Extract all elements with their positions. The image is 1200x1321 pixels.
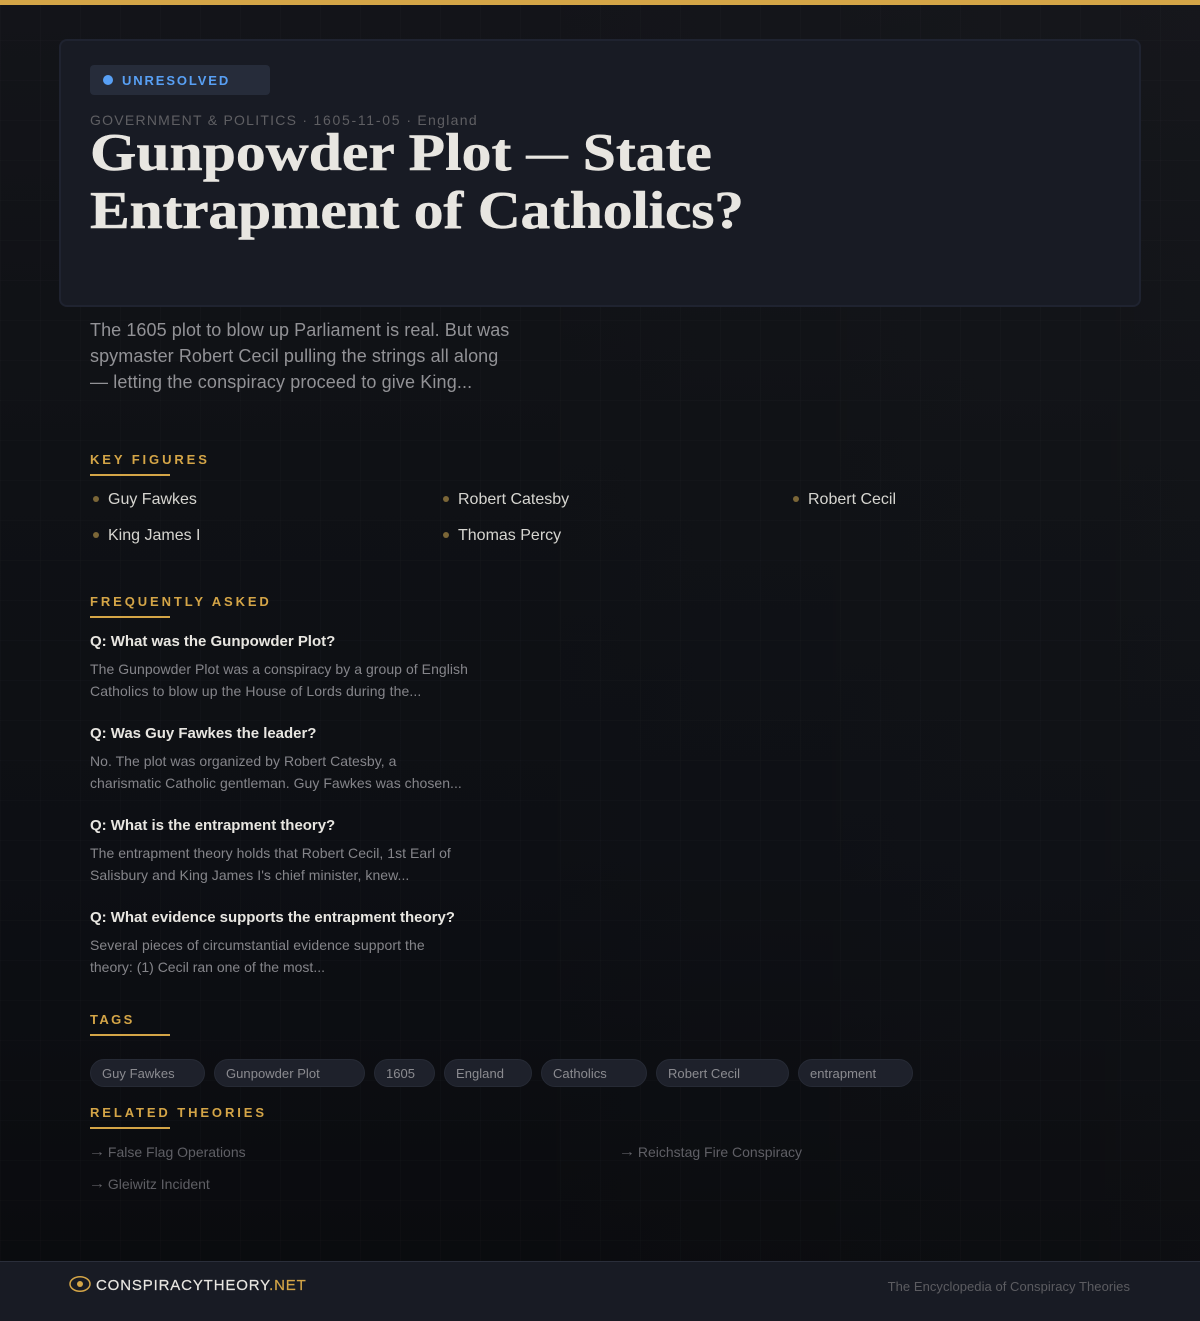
summary text xyxy=(90,320,509,392)
title: Entrapment of Catholics? xyxy=(90,182,744,240)
title xyxy=(90,124,744,240)
faq item 1: Q: What was the Gunpowder Plot? xyxy=(90,633,335,650)
footer bar xyxy=(0,1261,1200,1321)
faq item 2: No. The plot was organized by Robert Catesby, a xyxy=(90,753,396,769)
badge label: UNRESOLVED xyxy=(122,72,230,88)
tag: Catholics xyxy=(541,1059,647,1087)
faq item 3: The entrapment theory holds that Robert Cecil, 1st Earl of xyxy=(90,845,451,861)
tag: Gunpowder Plot xyxy=(214,1059,365,1087)
category and date line: GOVERNMENT & POLITICS · 1605-11-05 · England xyxy=(90,112,478,128)
panel: header card xyxy=(59,39,1141,307)
related link: Reichstag Fire Conspiracy: Reichstag Fire Conspiracy xyxy=(638,1144,802,1160)
tag: Robert Cecil: Robert Cecil xyxy=(668,1066,740,1081)
related link: False Flag Operations: False Flag Operations xyxy=(108,1144,246,1160)
tag: 1605 xyxy=(374,1059,435,1087)
faq item 3: Q: What is the entrapment theory? xyxy=(90,817,335,834)
icon: eye logo xyxy=(69,1276,91,1292)
faq item 4: theory: (1) Cecil ran one of the most... xyxy=(90,959,325,975)
figure: Robert Cecil: Robert Cecil xyxy=(808,491,896,508)
tag: Catholics: Catholics xyxy=(553,1066,607,1081)
status badge: unresolved xyxy=(90,65,270,95)
faq item 4: Q: What evidence supports the entrapment theory? xyxy=(90,909,455,926)
faq item 2 xyxy=(90,725,462,791)
related link: Gleiwitz Incident: Gleiwitz Incident xyxy=(108,1176,210,1192)
faq item 4: Several pieces of circumstantial evidence support the xyxy=(90,937,425,953)
summary text: — letting the conspiracy proceed to give King... xyxy=(90,372,472,392)
tag: entrapment: entrapment xyxy=(810,1066,876,1081)
heading: tags: TAGS xyxy=(90,1012,135,1027)
faq item 1: Catholics to blow up the House of Lords during the... xyxy=(90,683,421,699)
faq item 2: charismatic Catholic gentleman. Guy Fawkes was chosen... xyxy=(90,775,462,791)
figure: Guy Fawkes: Guy Fawkes xyxy=(108,491,197,508)
faq item 3: Salisbury and King James I's chief minister, knew... xyxy=(90,867,409,883)
faq item 4 xyxy=(90,909,455,975)
summary text: The 1605 plot to blow up Parliament is real. But was xyxy=(90,320,509,340)
tag: Gunpowder Plot: Gunpowder Plot xyxy=(226,1066,320,1081)
tag: Guy Fawkes: Guy Fawkes xyxy=(102,1066,175,1081)
heading: related theories: RELATED THEORIES xyxy=(90,1105,267,1120)
figure: Robert Catesby: Robert Catesby xyxy=(458,491,569,508)
heading: key figures: KEY FIGURES xyxy=(90,452,210,467)
related link: Reichstag Fire Conspiracy: → xyxy=(618,1143,635,1159)
related link: False Flag Operations: → xyxy=(88,1143,105,1159)
related link: Gleiwitz Incident: → xyxy=(88,1175,105,1191)
figure: Thomas Percy: Thomas Percy xyxy=(458,527,561,544)
summary text: spymaster Robert Cecil pulling the strings all along xyxy=(90,346,498,366)
tag: Guy Fawkes xyxy=(90,1059,205,1087)
icon: status dot xyxy=(103,75,113,85)
faq item 1: The Gunpowder Plot was a conspiracy by a group of English xyxy=(90,661,468,677)
section: key figures xyxy=(90,452,896,544)
tag: Robert Cecil xyxy=(656,1059,789,1087)
footer tagline: The Encyclopedia of Conspiracy Theories xyxy=(888,1279,1130,1294)
figure: King James I: King James I xyxy=(108,527,200,544)
faq item 3 xyxy=(90,817,451,883)
tag: England: England xyxy=(456,1066,504,1081)
faq item 2: Q: Was Guy Fawkes the leader? xyxy=(90,725,316,742)
tag: England xyxy=(444,1059,532,1087)
top accent bar xyxy=(0,0,1200,5)
tag: 1605: 1605 xyxy=(386,1066,415,1081)
heading: frequently asked: FREQUENTLY ASKED xyxy=(90,594,272,609)
faq item 1 xyxy=(90,633,468,699)
title: Gunpowder Plot — State xyxy=(90,124,712,182)
brand wordmark: CONSPIRACYTHEORY.NET xyxy=(96,1277,307,1294)
tag: entrapment xyxy=(798,1059,913,1087)
